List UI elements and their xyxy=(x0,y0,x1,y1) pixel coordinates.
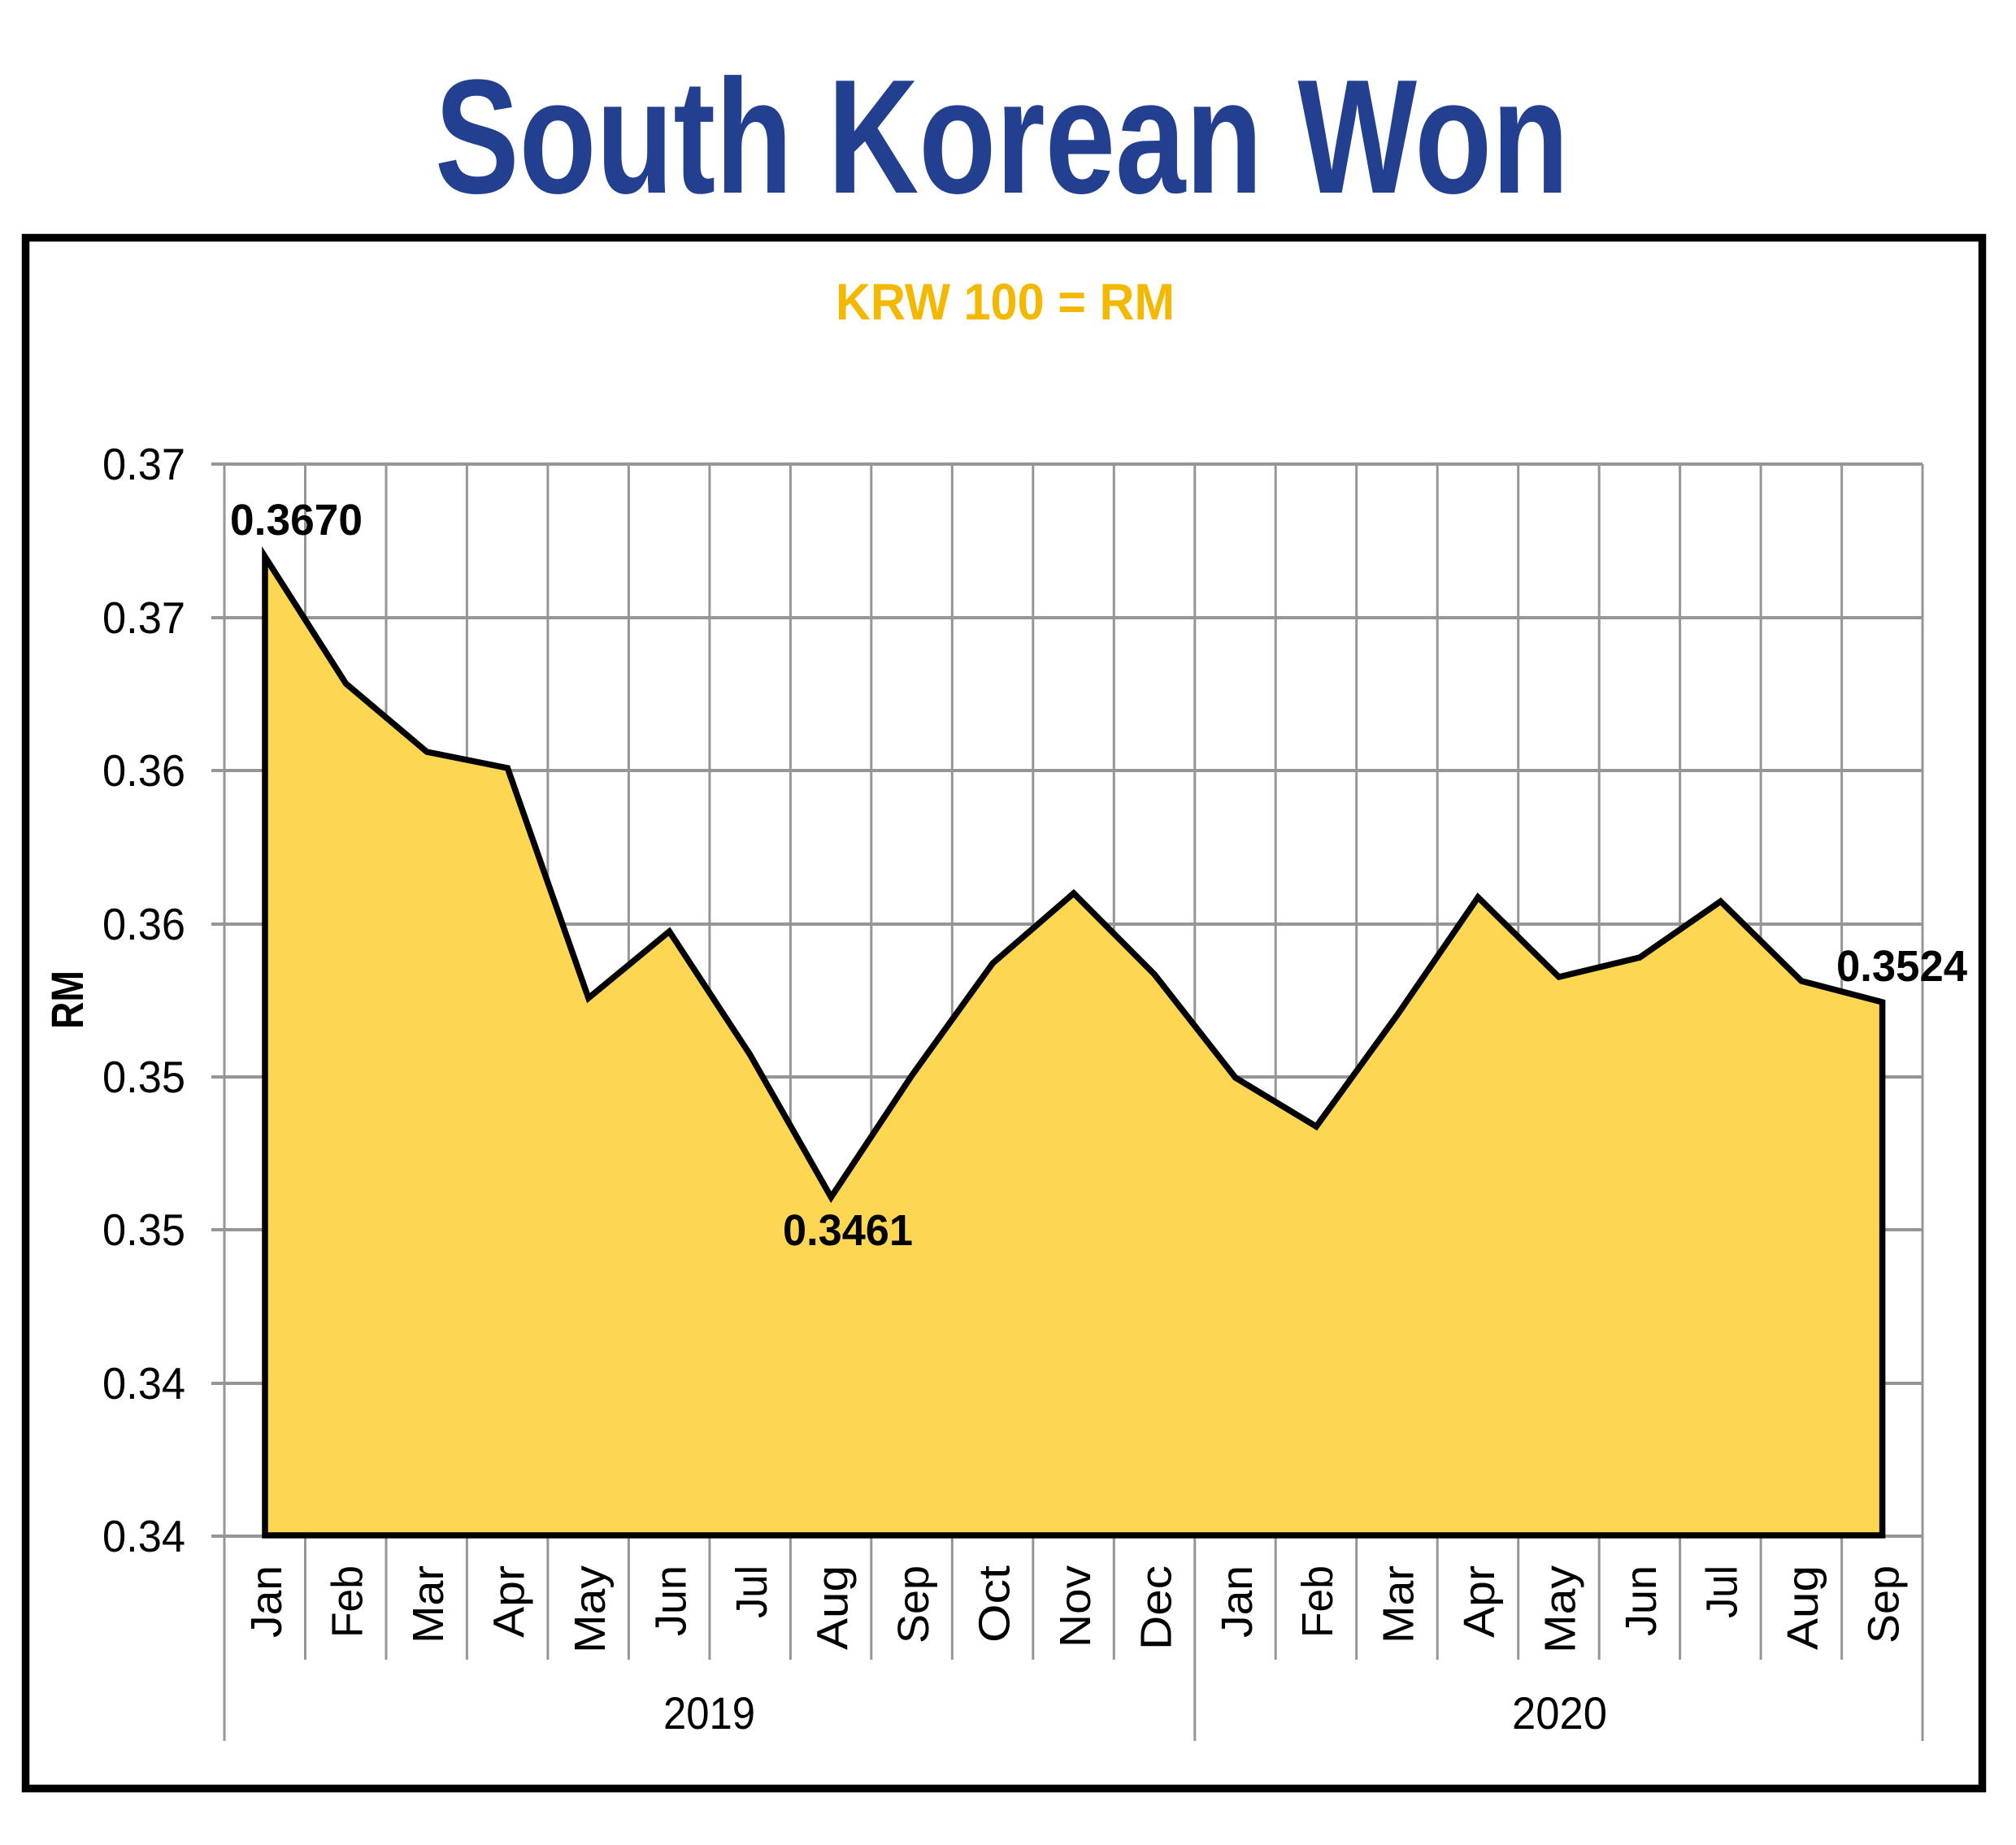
x axis month labels: Jul xyxy=(728,1565,776,1618)
y axis title: RM xyxy=(41,970,93,1029)
chart subtitle: KRW 100 = RM xyxy=(836,274,1175,331)
x axis month labels: Aug xyxy=(808,1565,857,1650)
y axis labels: 0.35 xyxy=(102,1205,185,1255)
y axis labels: 0.36 xyxy=(102,899,185,949)
x axis month labels: Mar xyxy=(1375,1565,1423,1643)
x axis month labels: May xyxy=(566,1565,615,1653)
chart: gridlines xyxy=(211,464,1923,1741)
x axis month labels: Nov xyxy=(1051,1565,1100,1647)
x axis month labels: Oct xyxy=(970,1565,1019,1643)
x axis month labels: Jun xyxy=(646,1565,695,1636)
x axis month labels: Sep xyxy=(889,1565,938,1643)
y axis labels: 0.36 xyxy=(102,745,185,796)
x axis month labels: Apr xyxy=(484,1565,533,1638)
x axis month labels: Jun xyxy=(1617,1565,1666,1636)
y axis labels: 0.34 xyxy=(102,1358,185,1409)
x axis month labels: Mar xyxy=(404,1565,453,1643)
x axis month labels: Jan xyxy=(1213,1565,1262,1638)
x axis month labels: Feb xyxy=(324,1565,372,1638)
x axis month labels: Aug xyxy=(1779,1565,1827,1650)
x axis month labels: Apr xyxy=(1455,1565,1504,1638)
y axis labels: 0.34 xyxy=(102,1511,185,1561)
y axis labels: 0.37 xyxy=(102,439,185,489)
x axis month labels: Jan xyxy=(242,1565,291,1638)
data label: first value: 0.3670 xyxy=(230,496,363,545)
y axis labels: 0.35 xyxy=(102,1052,185,1102)
data label: lowest value: 0.3461 xyxy=(783,1206,913,1255)
x axis year labels: 2020 xyxy=(1512,1687,1607,1739)
x axis month labels: Jul xyxy=(1698,1565,1747,1618)
x axis year labels xyxy=(663,1687,1607,1739)
x axis month labels: Dec xyxy=(1132,1565,1180,1650)
x axis month labels: Feb xyxy=(1293,1565,1342,1638)
x axis month labels xyxy=(242,1565,1909,1653)
x axis year labels: 2019 xyxy=(663,1687,755,1739)
data label: last value: 0.3524 xyxy=(1836,942,1967,991)
chart: yellow area series xyxy=(265,557,1883,1535)
title: South Korean Won xyxy=(435,46,1569,228)
x axis month labels: May xyxy=(1536,1565,1585,1653)
y axis labels: 0.37 xyxy=(102,593,185,643)
y axis labels xyxy=(102,439,185,1561)
x axis month labels: Sep xyxy=(1860,1565,1909,1643)
